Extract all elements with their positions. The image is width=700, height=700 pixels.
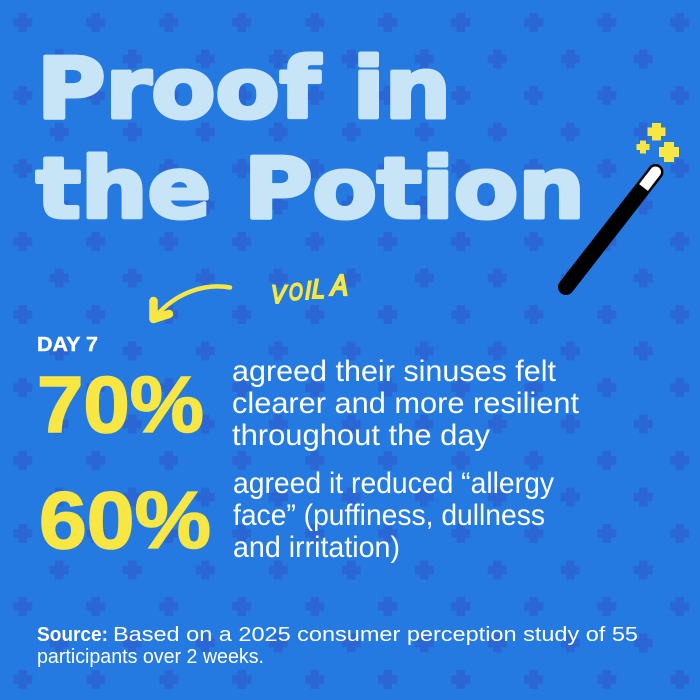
title [36,40,585,238]
text: 60% description: face” (puffiness, dullness [233,499,545,532]
handwritten label: VOILA: V [271,282,288,309]
text: 60% description [233,467,554,564]
stat: 70%: 70% [37,360,204,449]
source note: Source: [37,624,108,646]
text: 70% description [232,355,579,452]
title: the Potion [36,140,585,238]
label: day 7: DAY 7 [37,333,98,356]
wand stick [566,172,656,287]
icon: magic wand with sparkles [566,123,679,287]
handwritten label: VOILA: L [312,276,325,304]
text: 70% description: throughout the day [232,419,490,452]
stat: 60%: 60% [39,476,211,566]
handwritten label: VOILA: A [329,270,348,301]
text: 60% description: agreed it reduced “allergy [233,467,554,500]
handwritten label: VOILA [271,270,348,309]
text: 70% description: agreed their sinuses felt [232,355,556,388]
title: Proof in [37,40,451,138]
text: 60% description: and irritation) [233,531,400,564]
handwritten label: VOILA: O [289,279,303,306]
source note: Based on a 2025 consumer perception study of 55 [113,624,638,646]
arrow: curved pointer [154,286,230,319]
text: 70% description: clearer and more resilient [232,387,579,420]
handwritten label: VOILA: I [305,278,311,305]
source note: participants over 2 weeks. [37,646,264,668]
sparkles [636,123,679,162]
source note [37,624,638,668]
